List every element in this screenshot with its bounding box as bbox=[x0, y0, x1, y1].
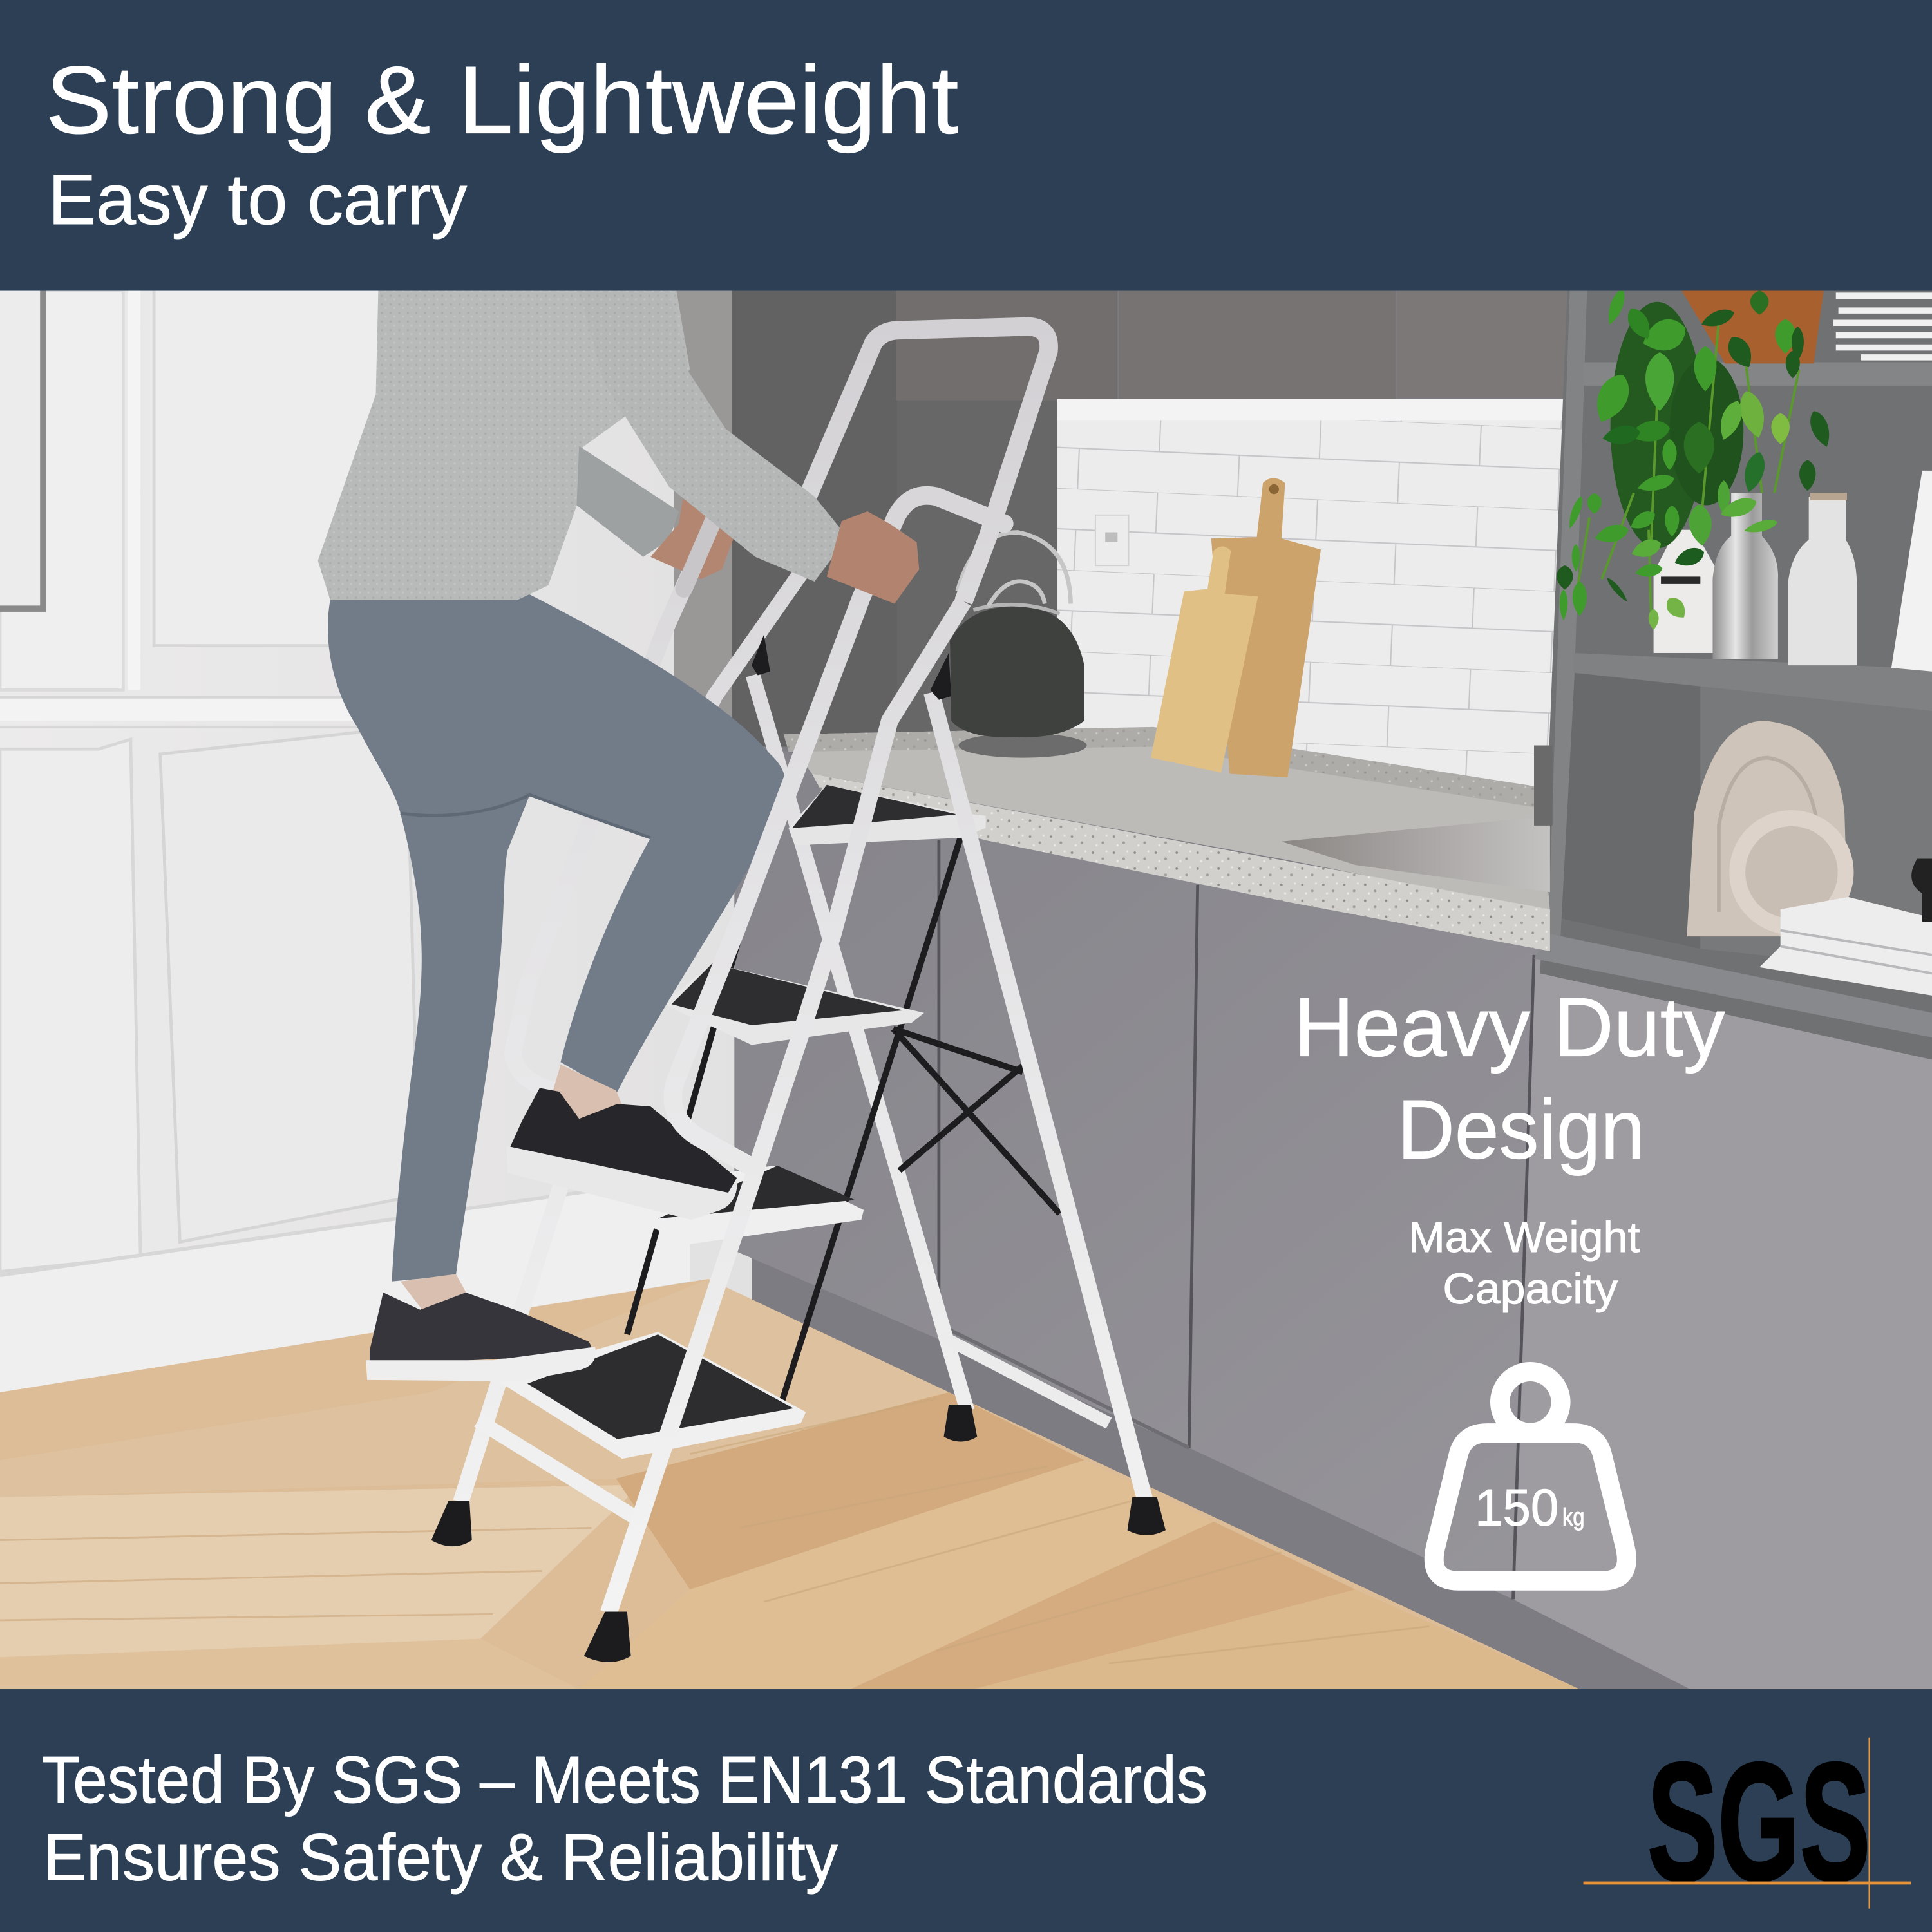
icon: wall socket bbox=[1095, 515, 1129, 565]
leg seam shadow bbox=[401, 795, 650, 838]
sweater body bbox=[318, 291, 690, 600]
brackets bbox=[752, 634, 951, 700]
heading: Strong & Lightweight bbox=[46, 46, 959, 154]
bottom text line 1: Tested By SGS – Meets EN131 Standards bbox=[42, 1742, 1208, 1817]
bottom banner bbox=[0, 1689, 1932, 1932]
upper shoe bbox=[506, 1088, 737, 1220]
panel: speckled countertop bbox=[784, 727, 1553, 951]
weight value: 150 bbox=[1475, 1479, 1558, 1537]
icon: terracotta pot and plates bbox=[1682, 291, 1932, 363]
panel: open shelving unit bbox=[1534, 291, 1932, 1059]
far lower leg bbox=[461, 495, 808, 1502]
step 4 bbox=[494, 1332, 806, 1459]
rubber feet bbox=[431, 1405, 1166, 1546]
far sleeve bbox=[576, 446, 679, 557]
near hand bbox=[827, 511, 919, 604]
step 2 bbox=[663, 963, 924, 1045]
panel: subway tile backsplash bbox=[1057, 399, 1572, 793]
inner hand rail bbox=[673, 495, 1004, 1166]
icon: white milk bottle bbox=[1654, 530, 1715, 653]
far hand rail bbox=[513, 524, 712, 1090]
panel: wainscoted wall bbox=[0, 286, 752, 1399]
panel: herringbone floor bbox=[0, 1279, 1580, 1689]
panel: kitchen scene bbox=[0, 286, 1932, 1689]
step 3 bbox=[584, 1166, 864, 1244]
panel: person climbing bbox=[318, 291, 786, 1381]
panel: step ladder front tubes bbox=[584, 495, 1004, 1662]
far hand grip bbox=[684, 518, 715, 589]
icon: 150 kg weight bbox=[1434, 1372, 1627, 1581]
leggings bbox=[328, 585, 786, 1282]
weight unit: kg bbox=[1562, 1504, 1584, 1531]
bottom text line 2: Ensures Safety & Reliability bbox=[43, 1820, 838, 1895]
tap bbox=[1534, 746, 1553, 826]
sink bbox=[1282, 818, 1550, 892]
panel: step ladder rear and steps bbox=[431, 327, 1166, 1546]
callout: heavy duty design bbox=[1294, 980, 1725, 1313]
main front leg bbox=[609, 601, 963, 1613]
near rubber foot bbox=[584, 1612, 631, 1662]
far rear leg bbox=[753, 675, 967, 1411]
ankle skin and socks bbox=[401, 1065, 622, 1314]
callout text: Max Weight bbox=[1408, 1213, 1640, 1262]
step 1 bbox=[788, 785, 986, 845]
icon: white grinder bottle bbox=[1788, 493, 1857, 665]
top banner bbox=[0, 0, 1932, 291]
far hand bbox=[650, 499, 734, 579]
lower shoe bbox=[366, 1293, 596, 1381]
icon: stacked books and knob bbox=[1759, 859, 1932, 996]
near rear leg bbox=[931, 692, 1146, 1503]
far handrail frame bbox=[808, 327, 1049, 601]
callout text line 2: Capacity bbox=[1443, 1265, 1618, 1313]
icon: steel bottle bbox=[1712, 493, 1778, 659]
subheading: Easy to carry bbox=[48, 160, 468, 240]
panel: upper wall and wall cabinets bbox=[732, 291, 1572, 746]
icon: kettle bbox=[950, 533, 1087, 758]
scene base bbox=[0, 291, 1932, 1689]
icon: chopping boards bbox=[1151, 478, 1321, 777]
panel: lower cabinets bbox=[734, 739, 1932, 1689]
callout heading: Heavy Duty bbox=[1294, 980, 1725, 1074]
near sleeve bbox=[579, 291, 842, 582]
icon: arched carved board bbox=[1687, 721, 1848, 936]
front cross bar bbox=[478, 1421, 638, 1519]
callout heading line 2: Design bbox=[1397, 1082, 1645, 1176]
icon: white picture frame bbox=[1891, 471, 1932, 672]
straps bbox=[627, 828, 1059, 1419]
icon: hanging pothos plant bbox=[1557, 287, 1835, 630]
rear cross bar bbox=[943, 1337, 1109, 1423]
